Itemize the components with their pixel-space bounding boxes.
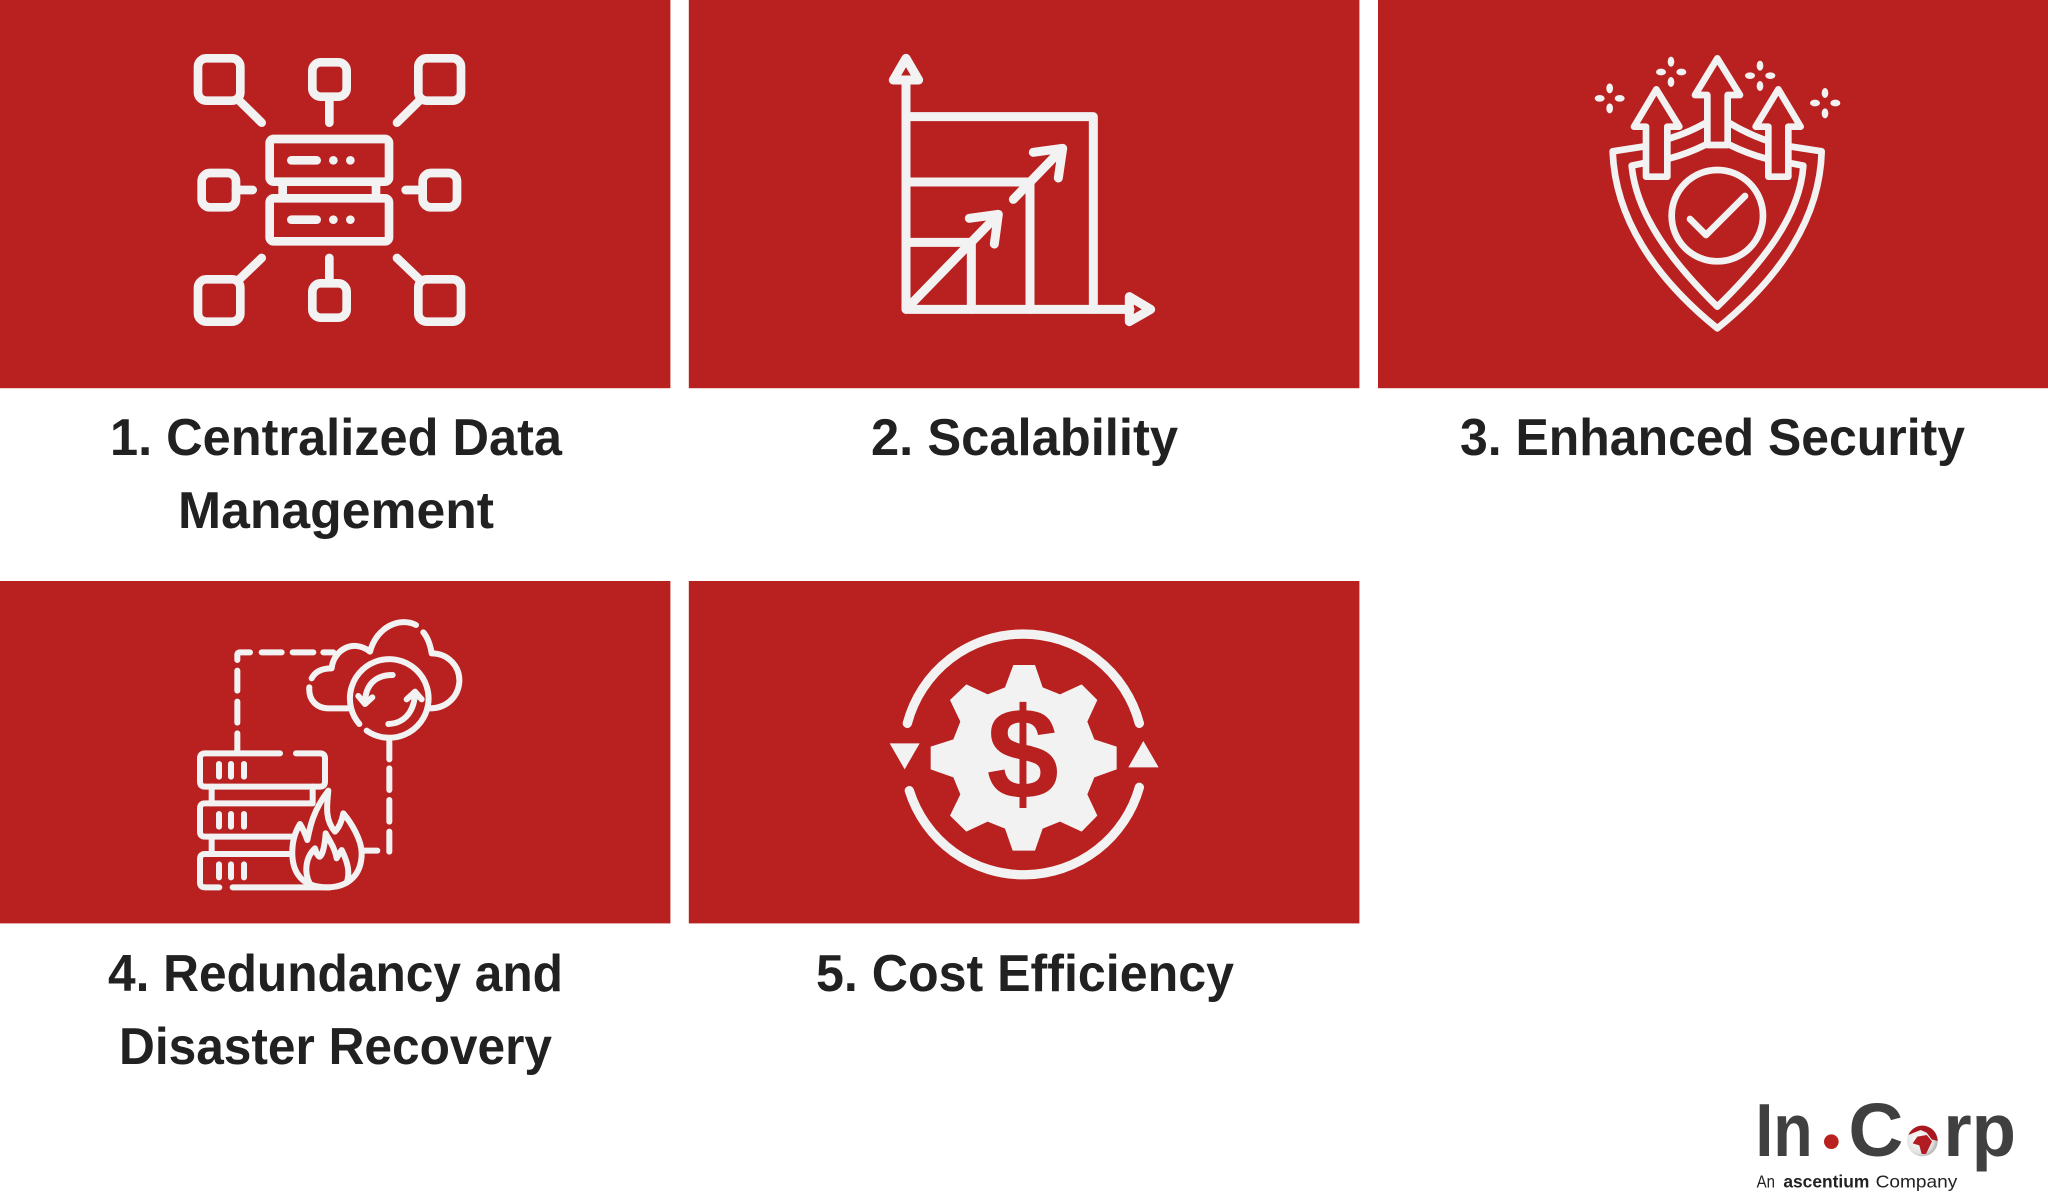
logo: InCorp	[1755, 1088, 2016, 1191]
heading: centralized data management: Management	[178, 482, 494, 540]
heading: cost efficiency: 5. Cost Efficiency	[816, 945, 1234, 1003]
logo globe	[1907, 1126, 1938, 1156]
tagline: Company	[1876, 1171, 1957, 1191]
icon: central server with connected nodes	[198, 58, 461, 322]
heading: centralized data management: 1. Centralized Data	[110, 409, 563, 467]
tagline	[1757, 1171, 1957, 1191]
panel: scalability	[689, 0, 1359, 388]
panel: centralized data management	[0, 0, 670, 388]
logo wordmark: In	[1755, 1088, 1813, 1172]
heading: enhanced security: 3. Enhanced Security	[1460, 409, 1965, 467]
tagline: ascentium	[1783, 1171, 1869, 1191]
icon: gear with dollar sign and cycle arrows	[890, 634, 1159, 875]
icon: server rack on fire with cloud backup	[200, 622, 459, 887]
logo wordmark: C	[1848, 1088, 1903, 1172]
icon: gear with dollar sign and cycle arrows: $	[987, 680, 1059, 826]
heading: redundancy and disaster recovery: 4. Redundancy and	[108, 945, 563, 1003]
panel: redundancy and disaster recovery	[0, 581, 670, 923]
logo wordmark: rp	[1943, 1088, 2016, 1172]
panel: enhanced security	[1378, 0, 2048, 388]
panel: cost efficiency	[689, 581, 1359, 923]
logo wordmark	[1755, 1088, 2016, 1172]
heading: scalability: 2. Scalability	[871, 409, 1178, 467]
tagline: An	[1757, 1171, 1775, 1191]
heading: redundancy and disaster recovery: Disaster Recovery	[119, 1018, 552, 1076]
icon: shield with check and up arrows	[1595, 57, 1840, 328]
icon: growth chart with arrows	[893, 58, 1151, 322]
